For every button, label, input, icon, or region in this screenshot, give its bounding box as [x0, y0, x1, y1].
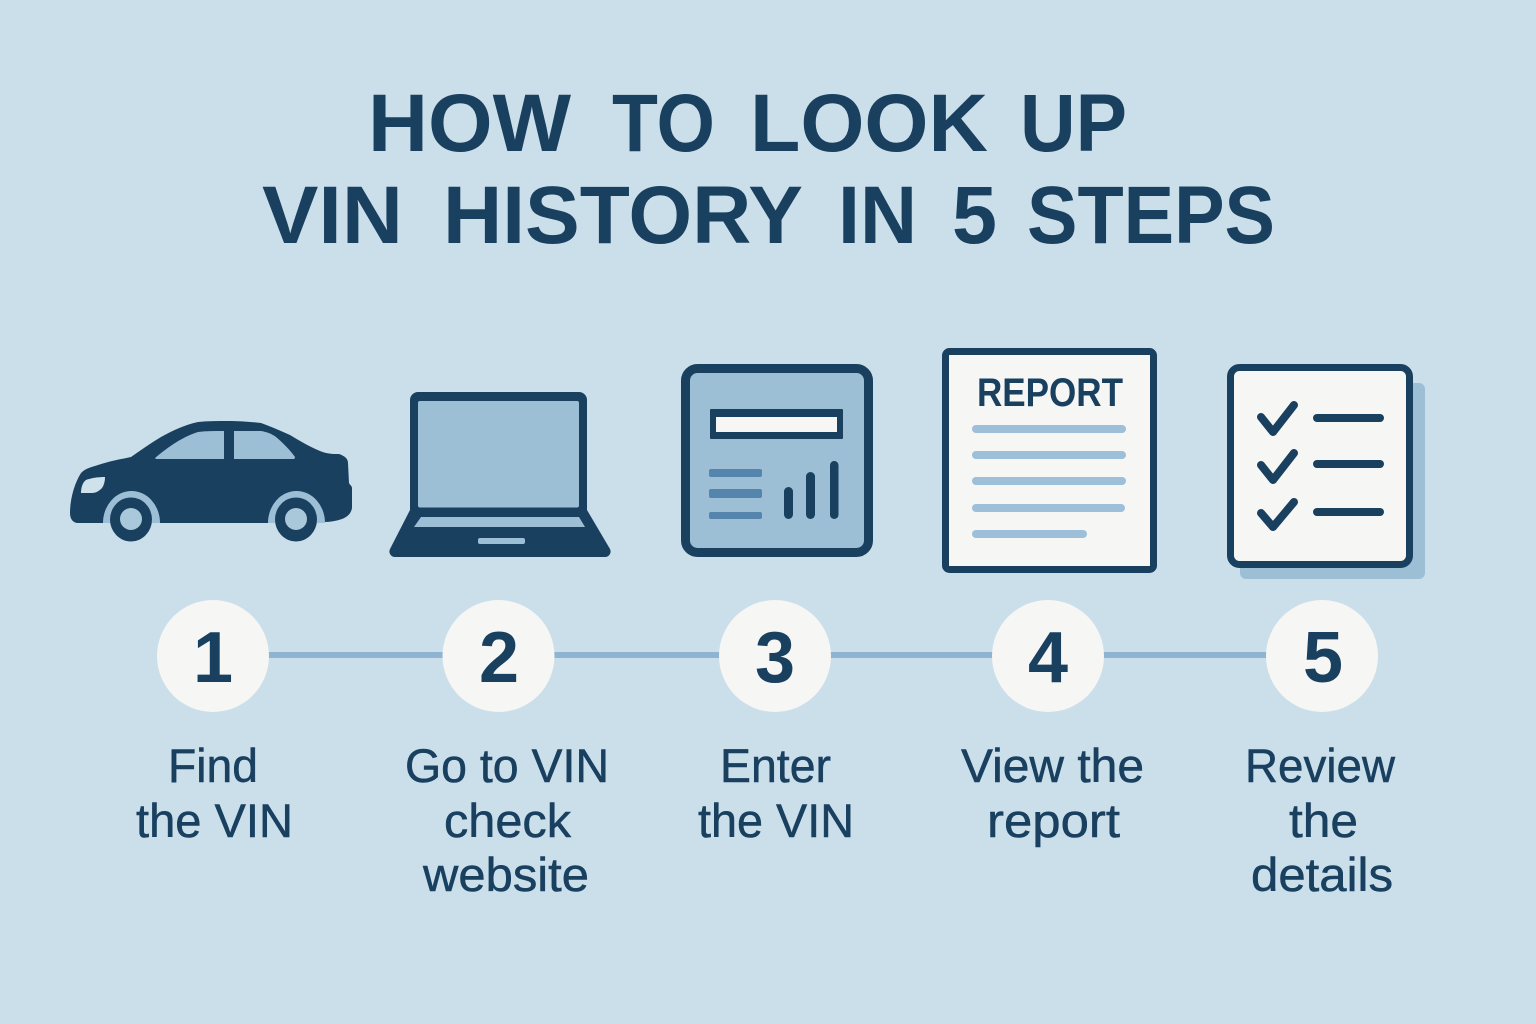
step 5 label: Review [1245, 739, 1396, 792]
step 2 label: Go to VIN [405, 739, 609, 792]
title [262, 78, 1275, 261]
step 3 label: Enter [720, 739, 831, 792]
step 5 label: details [1251, 848, 1393, 901]
title: IN [838, 170, 917, 261]
step 3 label: the VIN [698, 794, 854, 847]
step 2 number: 2 [479, 618, 519, 698]
step 5 number: 5 [1303, 618, 1343, 698]
title: LOOK [750, 78, 988, 169]
step 1 label [136, 739, 293, 847]
title: HOW [368, 78, 572, 169]
step 2 label: website [422, 848, 589, 901]
step 5 label: the [1289, 794, 1358, 847]
title: UP [1020, 78, 1127, 169]
step 5 label [1245, 739, 1396, 901]
title: VIN [262, 170, 403, 261]
icon: report document: REPORT [977, 371, 1123, 415]
step 1 number [157, 600, 269, 712]
title: 5 [952, 170, 997, 261]
step 2 number [442, 600, 554, 712]
step 2 label [405, 739, 609, 901]
icon: checklist [1230, 368, 1425, 579]
step 4 number [992, 600, 1104, 712]
step 2 label: check [444, 794, 572, 847]
title: HISTORY [443, 170, 803, 261]
step 4 label: View the [961, 739, 1144, 792]
icon: report document [946, 352, 1154, 570]
step 3 label [698, 739, 854, 847]
step 4 label [961, 739, 1144, 847]
step 4 number: 4 [1028, 618, 1068, 698]
step 3 number [719, 600, 831, 712]
icon: laptop [389, 392, 611, 557]
step 5 number [1266, 600, 1378, 712]
step 1 label: Find [168, 739, 258, 792]
timeline connector [260, 652, 1280, 658]
title: STEPS [1027, 170, 1275, 261]
step 1 number: 1 [193, 618, 233, 698]
title: TO [612, 78, 715, 169]
step 4 label: report [987, 794, 1120, 847]
icon: VIN entry form [686, 368, 868, 552]
icon: car [70, 421, 352, 542]
step 1 label: the VIN [136, 794, 293, 847]
step 3 number: 3 [755, 618, 795, 698]
